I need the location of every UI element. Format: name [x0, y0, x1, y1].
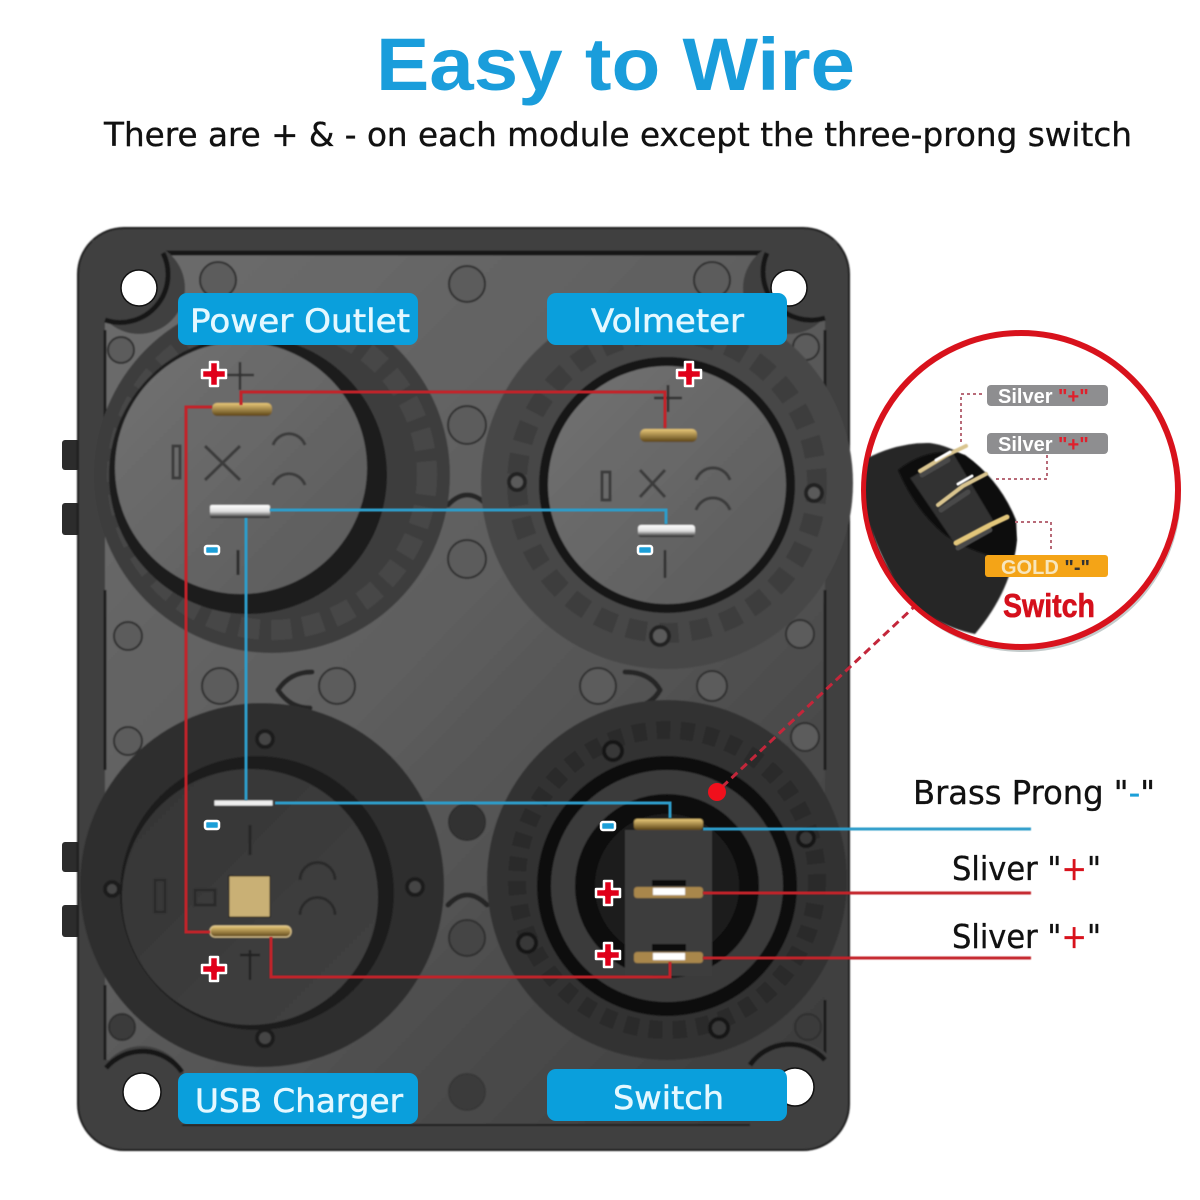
arrow: dashed leader to zoom circle	[708, 606, 915, 801]
label: power outlet: Power Outlet	[190, 302, 410, 340]
tag: silver positive 2: Silver "+"	[998, 434, 1089, 456]
title: Easy to Wire	[376, 23, 855, 106]
moulded round dimples	[108, 262, 821, 1110]
usb contact pad	[229, 876, 270, 917]
label: usb charger: USB Charger	[195, 1082, 404, 1120]
tag: gold negative	[985, 555, 1108, 579]
subtitle: There are + & - on each module except the three-prong switch	[103, 115, 1132, 154]
polarity markers	[202, 362, 701, 981]
wiring: red positive lines	[186, 392, 1031, 977]
label: voltmeter	[547, 293, 787, 345]
module: usb charger	[80, 703, 444, 1067]
panel: switch panel back	[78, 228, 853, 1150]
switch caption: Switch	[1003, 587, 1095, 624]
switch photo	[860, 443, 1017, 634]
mounting holes	[121, 270, 814, 1111]
label: usb charger	[178, 1073, 418, 1124]
corner bosses	[92, 240, 841, 1138]
module: power outlet	[94, 297, 450, 653]
callout: sliver positive 1: Sliver "+"	[952, 849, 1101, 888]
wiring: blue negative lines	[246, 510, 1031, 829]
label: switch	[547, 1069, 787, 1121]
panel: zoomed switch detail	[860, 333, 1181, 652]
side mounting tabs	[62, 440, 80, 937]
module: voltmeter	[481, 297, 853, 669]
label: switch: Switch	[613, 1079, 724, 1117]
tag: gold negative: GOLD "-"	[1001, 557, 1090, 579]
central moulded ribs	[278, 495, 660, 905]
dotted leader lines	[961, 394, 1051, 550]
callout: brass prong: Brass Prong "-"	[913, 773, 1155, 812]
module: rocker switch	[487, 700, 847, 1060]
label: power outlet	[178, 293, 418, 345]
tag: silver positive 1: Silver "+"	[998, 386, 1089, 408]
callout: sliver positive 2: Sliver "+"	[952, 917, 1101, 956]
label: voltmeter: Volmeter	[591, 302, 745, 340]
